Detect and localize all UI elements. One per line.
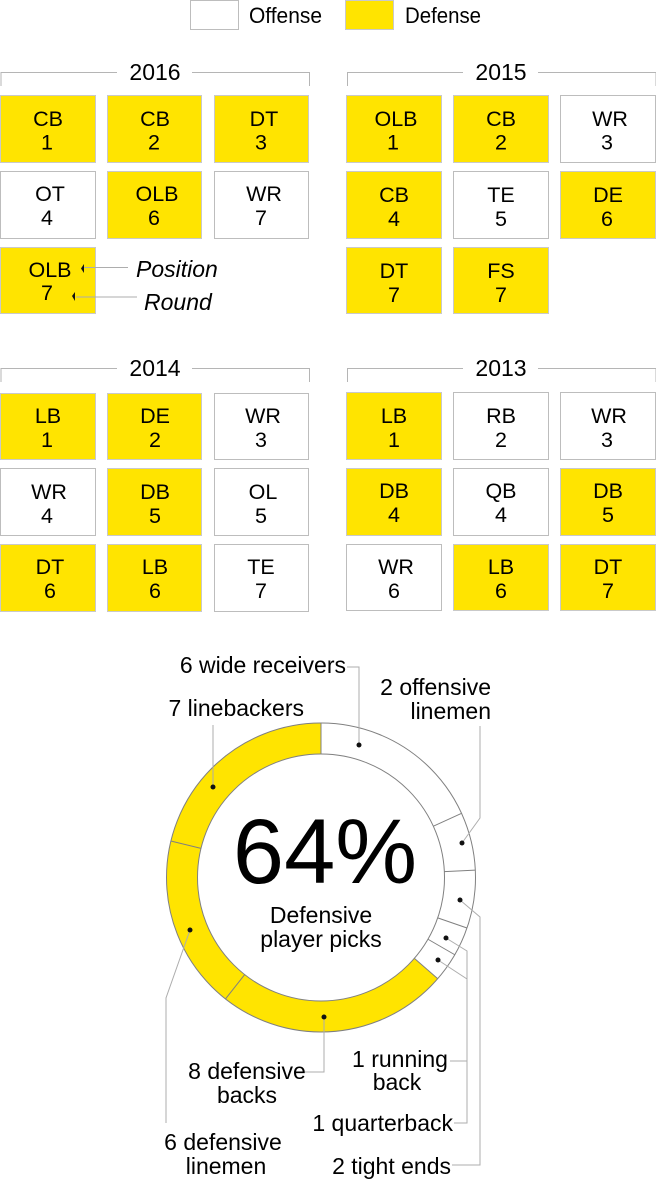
label: defensive backs: backs — [217, 1082, 277, 1108]
label: defensive linemen — [164, 1129, 282, 1179]
heading: 2015 — [348, 59, 656, 86]
pick: DB 4: DB — [379, 479, 409, 503]
callout: round: Round — [144, 289, 213, 315]
pick: OL 5: 5 — [255, 504, 267, 528]
pick: LB 6: LB — [488, 555, 514, 579]
label: running back: 1 running — [352, 1046, 448, 1072]
pick: WR 3: WR — [591, 404, 627, 428]
legend: Offense — [249, 3, 322, 28]
label: offensive linemen: 2 offensive — [380, 674, 491, 700]
pick: OLB 7: 7 — [41, 281, 53, 305]
pick: DT 7: 7 — [388, 283, 400, 307]
pick: OLB 1: OLB — [374, 107, 418, 131]
heading: 2014: 2014 — [129, 355, 181, 381]
pick: DT 3: DT — [250, 107, 278, 131]
pick: RB 2: 2 — [495, 428, 507, 452]
pick: OLB 7 — [0, 248, 96, 314]
pick: DB 5 — [560, 468, 656, 536]
pick: LB 6: 6 — [495, 579, 507, 603]
pick: DB 4: 4 — [388, 503, 400, 527]
pick: LB 1: LB — [381, 404, 407, 428]
pick: DT 6: DT — [36, 555, 64, 579]
pick: CB 2 — [108, 96, 202, 162]
pick: CB 2: 2 — [148, 130, 160, 154]
callout: round — [72, 289, 213, 315]
pick: WR 3: 3 — [255, 428, 267, 452]
pick: WR 3: WR — [245, 404, 281, 428]
pick: DB 5 — [108, 468, 202, 536]
ring: defensive arc — [167, 723, 438, 1032]
pick: DT 7 — [346, 248, 442, 314]
pick: QB 4: QB — [485, 479, 517, 503]
pick: DE 6 — [560, 172, 656, 238]
pick: LB 1: 1 — [41, 428, 53, 452]
pick: WR 7: WR — [246, 182, 282, 206]
label: running back — [352, 1046, 448, 1095]
heading: 2013 — [348, 355, 656, 382]
label: offensive linemen: linemen — [410, 698, 491, 724]
pick: CB 2: 2 — [495, 130, 507, 154]
pick: CB 4 — [346, 172, 442, 238]
pick: OLB 1 — [346, 96, 442, 162]
pick: DB 4 — [346, 468, 442, 536]
pick: FS 7 — [454, 248, 548, 314]
pick: LB 1: LB — [35, 404, 61, 428]
pick: WR 4 — [0, 468, 96, 536]
pick: TE 5 — [454, 172, 548, 238]
pick: LB 1 — [0, 394, 96, 460]
heading: 2015: 2015 — [475, 59, 527, 85]
pick: DT 7: 7 — [602, 579, 614, 603]
label: defensive linemen: linemen — [186, 1153, 266, 1179]
heading: 2013: 2013 — [475, 355, 527, 381]
pick: OL 5 — [214, 468, 308, 536]
pick: DT 6 — [0, 544, 96, 612]
pick: WR 3 — [214, 394, 308, 460]
donut chart — [164, 652, 491, 1179]
pick: TE 7: TE — [247, 555, 275, 579]
pick: DE 2 — [108, 394, 202, 460]
pick: WR 7 — [214, 172, 308, 238]
label: defensive linemen: 6 defensive — [164, 1129, 282, 1155]
data dots — [188, 742, 464, 1020]
legend: Defense — [405, 3, 481, 28]
pick: CB 1: CB — [33, 107, 63, 131]
pick: QB 4: 4 — [495, 503, 507, 527]
label: quarterback: 1 quarterback — [312, 1110, 453, 1136]
pick: DT 6: 6 — [44, 579, 56, 603]
pick: LB 6 — [454, 544, 548, 610]
pick: DT 7 — [560, 544, 656, 610]
pick: WR 6: WR — [378, 555, 414, 579]
panel: 2013 — [346, 355, 656, 610]
pick: RB 2: RB — [486, 404, 516, 428]
pick: DB 5: 5 — [149, 504, 161, 528]
pick: DB 5: DB — [593, 479, 623, 503]
legend — [190, 0, 481, 30]
heading: 2016 — [1, 59, 310, 86]
callout: position — [81, 256, 218, 282]
pick: DT 7: DT — [380, 259, 408, 283]
pick: LB 1 — [346, 392, 442, 460]
pick: WR 4: WR — [31, 480, 67, 504]
panel: 2015 — [346, 59, 656, 314]
pick: CB 1 — [0, 96, 96, 162]
pick: OT 4 — [0, 172, 96, 238]
pick: DT 7: DT — [594, 555, 622, 579]
pick: OT 4: 4 — [41, 206, 53, 230]
pick: TE 5: TE — [487, 183, 515, 207]
pick: FS 7: 7 — [495, 283, 507, 307]
pick: WR 3: WR — [592, 107, 628, 131]
label: defensive backs — [188, 1058, 306, 1108]
pick: TE 7 — [214, 544, 308, 612]
pick: DB 5: DB — [140, 480, 170, 504]
pick: DE 6: DE — [593, 183, 623, 207]
pick: OT 4: OT — [35, 182, 65, 206]
label: linebackers: 7 linebackers — [168, 695, 304, 721]
pick: OLB 6 — [108, 172, 202, 238]
pick: OLB 6: 6 — [148, 206, 160, 230]
label: running back: back — [373, 1069, 422, 1095]
pick: WR 3: 3 — [601, 130, 613, 154]
pick: WR 3: 3 — [601, 428, 613, 452]
pick: DE 2: DE — [140, 404, 170, 428]
pick: LB 6: 6 — [149, 579, 161, 603]
panel: 2016 — [0, 59, 310, 315]
pick: CB 2 — [454, 96, 548, 162]
pick: DT 3 — [214, 96, 308, 162]
pick: QB 4 — [454, 468, 548, 536]
pick: LB 1: 1 — [388, 428, 400, 452]
pick: LB 6: LB — [142, 555, 168, 579]
center caption: Defensive — [270, 902, 372, 928]
pick: DE 2: 2 — [149, 428, 161, 452]
pick: WR 3 — [560, 96, 656, 162]
leader lines — [166, 667, 480, 1165]
pick: DE 6: 6 — [601, 207, 613, 231]
pick: FS 7: FS — [487, 259, 515, 283]
center value: 64%: 64% — [233, 801, 417, 903]
pick: OLB 1: 1 — [387, 130, 399, 154]
pick: OL 5: OL — [249, 480, 277, 504]
label: tight ends: 2 tight ends — [332, 1153, 451, 1179]
heading: 2016: 2016 — [129, 59, 181, 85]
pick: OLB 7: OLB — [28, 258, 72, 282]
pick: WR 6 — [346, 544, 442, 610]
center caption — [260, 902, 382, 952]
pick: DT 3: 3 — [255, 130, 267, 154]
center caption: player picks — [260, 926, 382, 952]
pick: RB 2 — [454, 392, 548, 460]
pick: CB 1: 1 — [41, 130, 53, 154]
pick: CB 4: 4 — [388, 207, 400, 231]
pick: WR 4: 4 — [41, 504, 53, 528]
pick: WR 6: 6 — [388, 579, 400, 603]
callout: position: Position — [136, 256, 218, 282]
pick: WR 7: 7 — [255, 206, 267, 230]
label: wide receivers: 6 wide receivers — [180, 652, 346, 678]
pick: CB 2: CB — [486, 107, 516, 131]
pick: CB 4: CB — [379, 183, 409, 207]
heading: 2014 — [1, 355, 310, 382]
pick: OLB 6: OLB — [135, 182, 179, 206]
pick: CB 2: CB — [140, 107, 170, 131]
label: defensive backs: 8 defensive — [188, 1058, 306, 1084]
pick: DB 5: 5 — [602, 503, 614, 527]
pick: WR 3 — [560, 392, 656, 460]
pick: TE 5: 5 — [495, 207, 507, 231]
pick: TE 7: 7 — [255, 579, 267, 603]
panel: 2014 — [0, 355, 310, 612]
label: offensive linemen — [380, 674, 491, 724]
pick: LB 6 — [108, 544, 202, 612]
